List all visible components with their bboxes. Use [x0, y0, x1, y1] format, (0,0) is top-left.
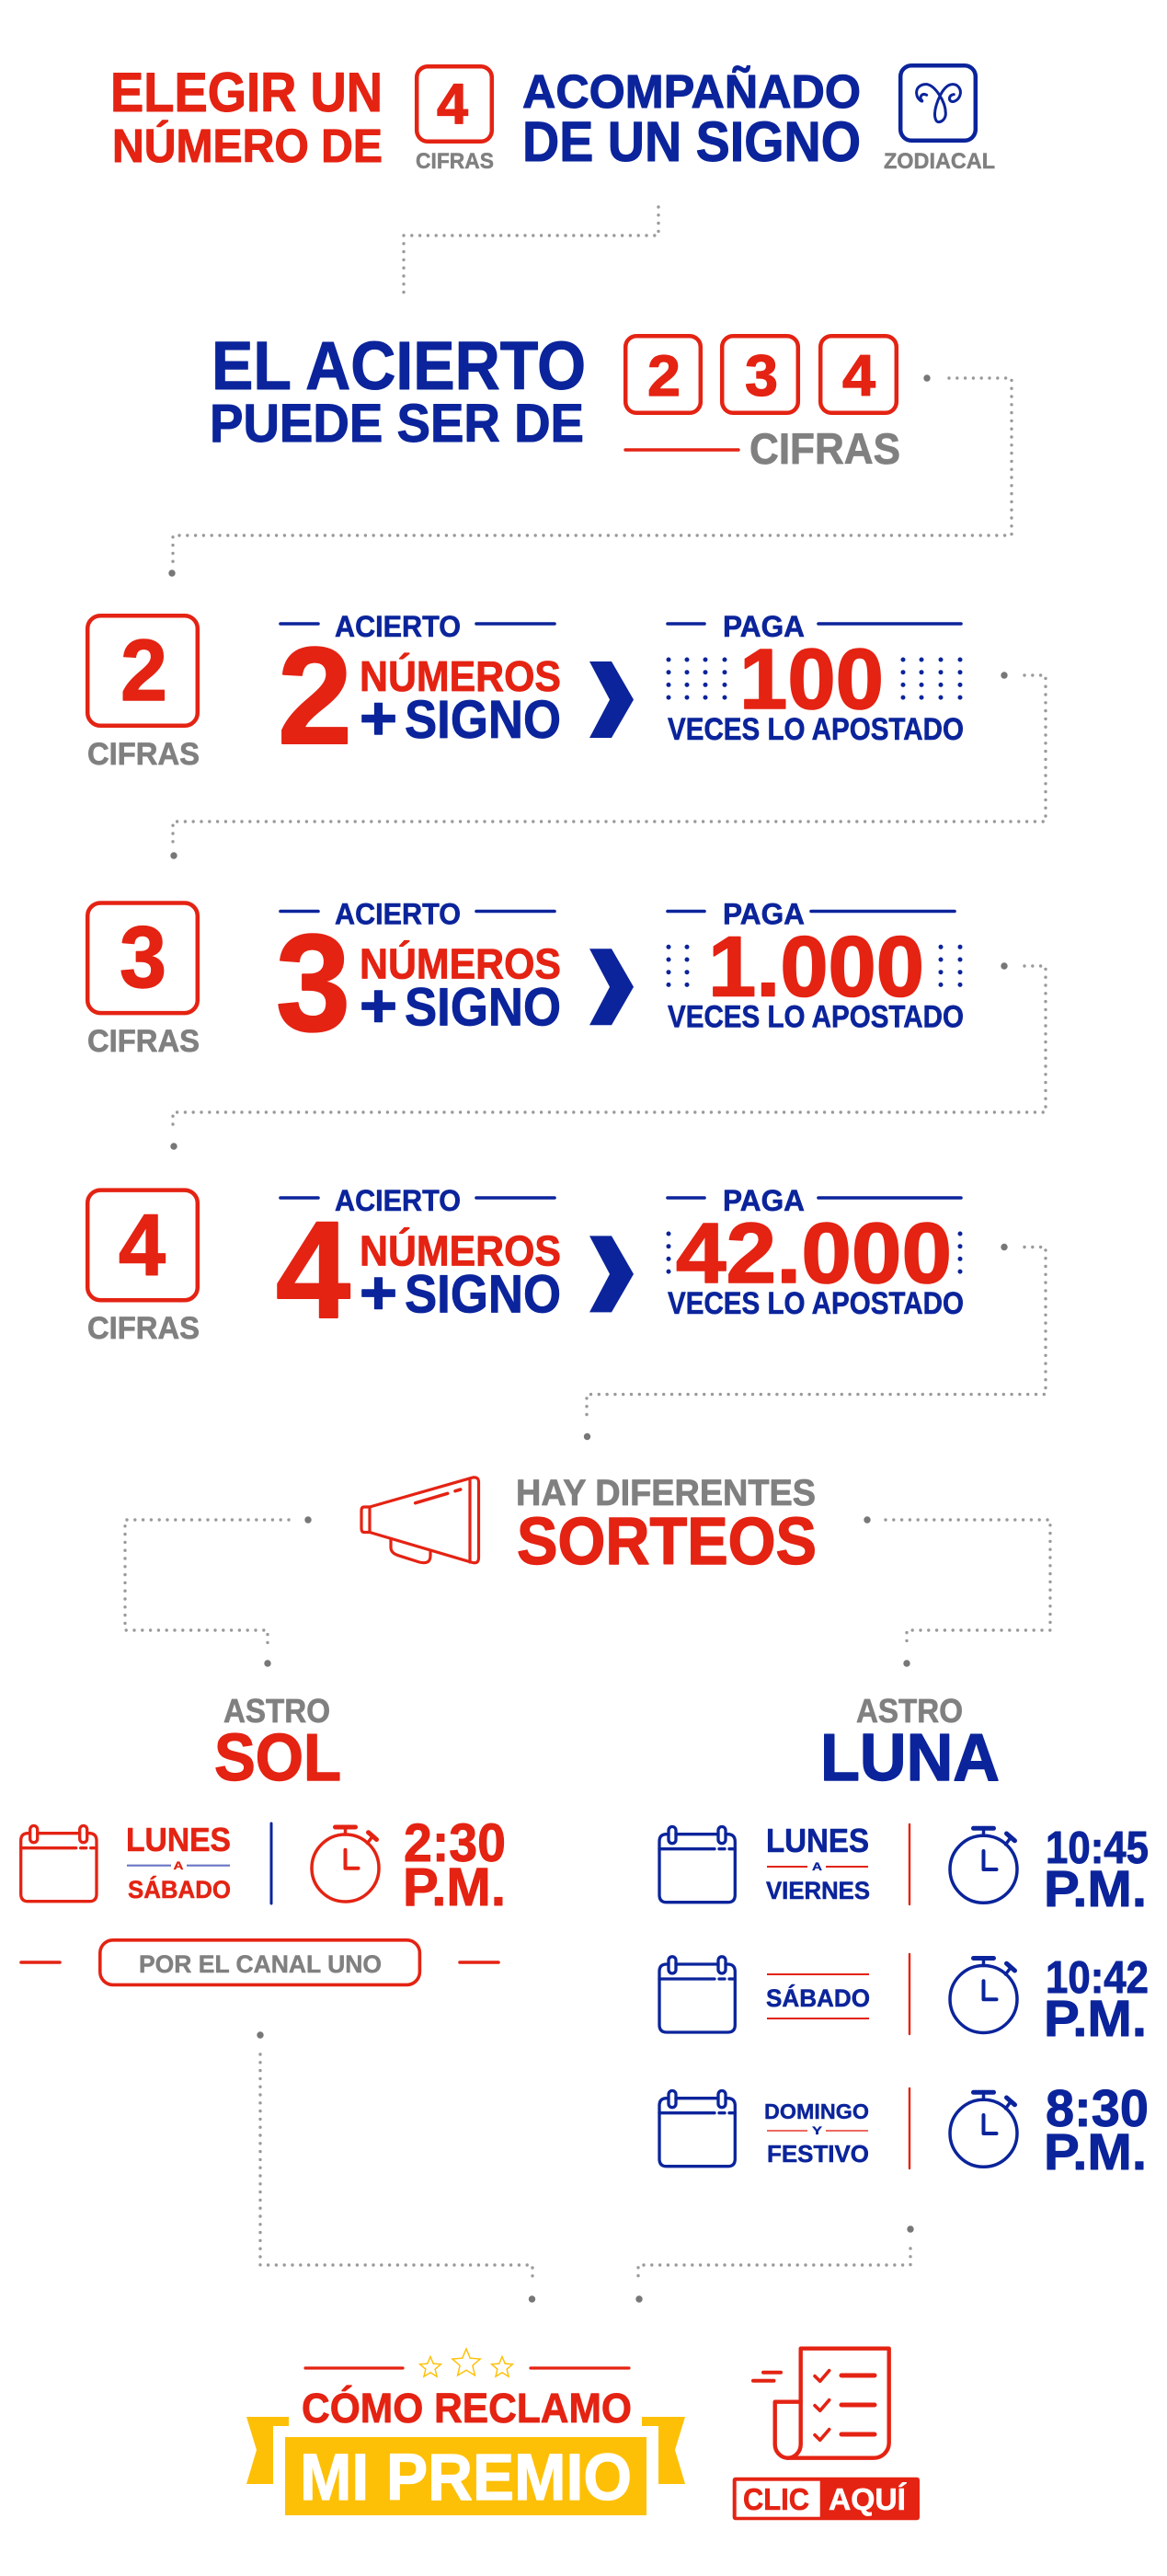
numeros + signo: [360, 940, 561, 1040]
icon: calendar: [659, 2090, 735, 2167]
digit box 2: 2: [647, 344, 681, 408]
heading: acompanado de un signo: [522, 64, 861, 173]
label: cifras with rule: CIFRAS: [749, 424, 900, 473]
time: 8:30 pm: P.M.: [1044, 2122, 1147, 2180]
acierto heading: ACIERTO: [335, 1184, 461, 1217]
numeros + signo: NÚMEROS: [360, 940, 561, 988]
digit box 4 cifras: [87, 1190, 200, 1346]
numeros + signo: +: [360, 972, 397, 1040]
dot pattern left: [666, 1234, 671, 1273]
icon: stopwatch: [312, 1827, 379, 1902]
veces lo apostado: VECES LO APOSTADO: [668, 1286, 964, 1321]
big number 4: 4: [276, 1192, 350, 1347]
heading: elegir un numero de: [110, 62, 383, 172]
icon: checklist document: [753, 2349, 889, 2458]
digit box 2: [625, 336, 701, 413]
digit box 4 cifras: 4: [119, 1197, 166, 1294]
paga heading: PAGA: [723, 898, 805, 931]
icon: aries zodiac sign box: [900, 65, 976, 141]
paga heading: PAGA: [723, 610, 805, 643]
icon: megaphone: [361, 1478, 478, 1563]
digit box 2 cifras: [87, 615, 200, 772]
stars and rules: [305, 2349, 629, 2376]
numeros + signo: NÚMEROS: [360, 652, 561, 700]
heading: acompanado de un signo: ACOMPAÑADO: [522, 64, 861, 118]
digit box 3: 3: [745, 344, 778, 408]
step 2: the hit can be 2, 3 or 4 digits: [210, 328, 900, 473]
digit box 2 cifras: 2: [120, 622, 167, 719]
digit box 4: [820, 336, 897, 413]
icon: stopwatch: [950, 2092, 1017, 2167]
callout: por el canal uno: [21, 1940, 498, 1984]
time: 10:45 pm: 10:45: [1046, 1823, 1149, 1873]
label: cifras: CIFRAS: [416, 149, 494, 174]
text: lunes a viernes: A: [812, 1860, 822, 1873]
time: 2:30 pm: [403, 1813, 506, 1917]
numeros + signo: NÚMEROS: [360, 1227, 561, 1275]
big number 2: 2: [278, 618, 352, 773]
dot pattern left: [669, 947, 687, 986]
icon: box with digit 4: [417, 66, 492, 142]
icon: box with digit 4: 4: [437, 73, 469, 136]
row: 4 cifras pays 42.000: [87, 1184, 964, 1347]
label: zodiacal: ZODIACAL: [884, 149, 995, 174]
icon: calendar: [659, 1827, 735, 1903]
ribbon tail left: [246, 2417, 289, 2484]
digit box 3 cifras: 3: [120, 909, 166, 1006]
divider: [909, 1954, 910, 2034]
time: 8:30 pm: [1044, 2079, 1149, 2180]
heading: astro sol: ASTRO: [223, 1692, 330, 1730]
callout: por el canal uno: POR EL CANAL UNO: [139, 1950, 382, 1978]
time: 10:45 pm: [1044, 1823, 1149, 1917]
connector: sorteos to luna: [864, 1516, 1050, 1667]
payout 100: 100: [739, 631, 884, 727]
row: 3 cifras pays 1.000: [87, 898, 964, 1060]
digit box 3: [722, 336, 798, 413]
heading: el acierto puede ser de: EL ACIERTO: [212, 328, 586, 404]
acierto heading: ACIERTO: [335, 610, 461, 643]
heading: elegir un numero de: NÚMERO DE: [112, 120, 383, 172]
badge: como reclamo mi premio: [246, 2349, 685, 2515]
text: domingo y festivo: DOMINGO: [764, 2099, 869, 2123]
connector: row 2 to row 3: [170, 672, 1046, 859]
text: domingo y festivo: Y: [812, 2124, 822, 2137]
numeros + signo: +: [360, 1259, 397, 1327]
dot pattern right: [903, 660, 960, 699]
text: sabado: [766, 1974, 870, 2018]
heading: el acierto puede ser de: PUEDE SER DE: [210, 394, 584, 454]
heading: acompanado de un signo: DE UN SIGNO: [522, 110, 861, 173]
button: clic aqui: [733, 2478, 920, 2520]
divider: [909, 1824, 910, 1904]
text: lunes a sabado: [126, 1821, 231, 1903]
heading: astro luna: ASTRO: [856, 1692, 963, 1730]
time: 2:30 pm: 2:30: [404, 1813, 506, 1873]
row: 2 cifras pays 100: [87, 610, 964, 773]
connector: sol to prize: [257, 2031, 535, 2303]
acierto heading: ACIERTO: [335, 898, 461, 931]
text: mi premio: MI PREMIO: [300, 2442, 632, 2514]
payout 1.000: 1.000: [708, 918, 924, 1014]
time: 8:30 pm: 8:30: [1046, 2079, 1149, 2138]
divider: [909, 2088, 910, 2168]
heading: elegir un numero de: ELEGIR UN: [110, 62, 383, 123]
time: 10:42 pm: 10:42: [1046, 1953, 1149, 2003]
text: lunes a viernes: LUNES: [766, 1822, 869, 1859]
numeros + signo: [360, 1227, 561, 1327]
heading: hay diferentes sorteos: SORTEOS: [517, 1505, 817, 1579]
time: 10:42 pm: [1044, 1953, 1149, 2047]
panel: astro luna schedule: [659, 1692, 1149, 2180]
connector: step 2 to row 2 digits: [168, 374, 1012, 577]
digit box 2 cifras: CIFRAS: [87, 737, 200, 772]
numeros + signo: +: [360, 684, 397, 752]
heading: astro sol: [214, 1692, 341, 1795]
icon: stopwatch: [950, 1828, 1017, 1903]
connector: row 4 to sorteos: [584, 1244, 1046, 1440]
dot pattern right: [941, 947, 960, 986]
arrow chevron: [589, 1236, 634, 1312]
text: como reclamo: CÓMO RECLAMO: [302, 2385, 632, 2432]
panel: astro sol schedule: [21, 1692, 506, 1984]
heading: hay diferentes sorteos: HAY DIFERENTES: [516, 1473, 816, 1513]
arrow chevron: [589, 661, 634, 738]
icon: calendar: [21, 1825, 97, 1902]
button: clic aqui: AQUÍ: [829, 2482, 907, 2516]
digit box 3 cifras: CIFRAS: [87, 1024, 200, 1059]
text: domingo y festivo: FESTIVO: [767, 2140, 869, 2168]
connector: row 3 to row 4: [170, 962, 1046, 1150]
icon: calendar: [659, 1957, 735, 2032]
time: 10:45 pm: P.M.: [1044, 1859, 1147, 1917]
text: lunes a sabado: SÁBADO: [128, 1875, 231, 1903]
schedule: sabado: [659, 1953, 1149, 2047]
numeros + signo: SIGNO: [405, 1264, 561, 1325]
connector: luna to prize: [635, 2225, 914, 2303]
heading: hay diferentes sorteos: [516, 1473, 817, 1579]
payout 42.000: 42.000: [676, 1205, 952, 1301]
ribbon body: [285, 2437, 646, 2515]
icon: stopwatch: [950, 1958, 1017, 2033]
digit box 4 cifras: CIFRAS: [87, 1311, 200, 1346]
heading: astro luna: LUNA: [820, 1721, 1000, 1795]
paga heading: PAGA: [723, 1184, 805, 1217]
numeros + signo: SIGNO: [405, 690, 561, 750]
digit box 3 cifras: [87, 903, 200, 1059]
veces lo apostado: VECES LO APOSTADO: [668, 999, 964, 1034]
heading: el acierto puede ser de: [210, 328, 586, 454]
dot pattern left: [669, 660, 725, 699]
schedule: domingo y festivo: [659, 2079, 1149, 2180]
text: lunes a viernes: VIERNES: [766, 1877, 870, 1904]
digit box 4: 4: [842, 344, 875, 408]
ribbon tail right: [642, 2417, 685, 2484]
heading: astro sol: SOL: [214, 1721, 341, 1795]
connector: sorteos to sol: [125, 1516, 312, 1667]
connector: step 1 to step 2: [404, 207, 658, 293]
numeros + signo: SIGNO: [405, 977, 561, 1038]
step 1: choose a number and sign: [110, 62, 995, 174]
time: 10:42 pm: P.M.: [1044, 1989, 1147, 2047]
veces lo apostado: VECES LO APOSTADO: [668, 712, 964, 747]
text: domingo y festivo: [764, 2099, 869, 2168]
schedule: lunes a viernes: [659, 1822, 1149, 1917]
time: 2:30 pm: P.M.: [403, 1857, 506, 1917]
text: lunes a sabado: A: [173, 1859, 184, 1872]
text: lunes a sabado: LUNES: [126, 1821, 231, 1858]
dot pattern right: [958, 1234, 962, 1273]
text: lunes a viernes: [766, 1822, 870, 1904]
divider: [270, 1823, 272, 1903]
arrow chevron: [589, 949, 634, 1025]
button: clic aqui: CLIC: [743, 2482, 809, 2516]
numeros + signo: [360, 652, 561, 752]
text: sabado: SÁBADO: [766, 1984, 870, 2012]
big number 3: 3: [276, 905, 350, 1060]
